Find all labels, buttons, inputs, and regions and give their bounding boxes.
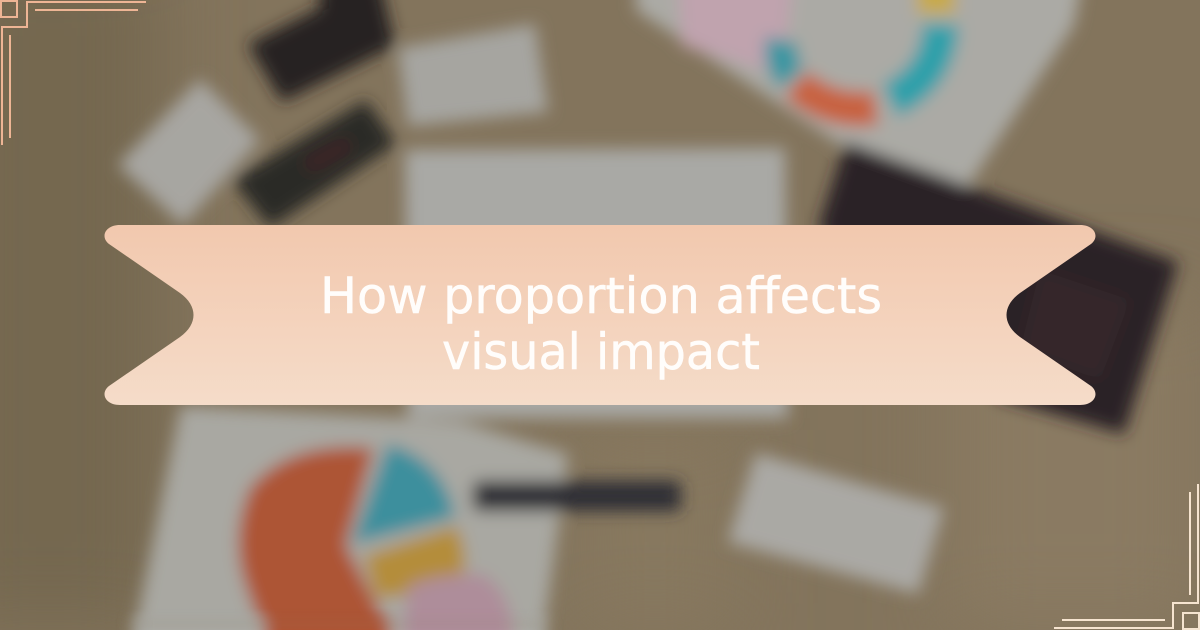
title xyxy=(320,267,882,381)
pie chart: yellow xyxy=(364,526,465,598)
keyboard xyxy=(405,148,788,418)
corner ornament: bottom right xyxy=(1054,484,1199,629)
pie chart: orange xyxy=(238,447,390,630)
top card xyxy=(398,24,548,126)
bottom edge restoration of paper and pie xyxy=(126,612,552,630)
donut chart xyxy=(781,40,792,78)
top right paper xyxy=(636,0,1082,186)
corner ornament: top left xyxy=(1,1,146,145)
pie chart: pink xyxy=(404,574,512,630)
dark tablet xyxy=(818,142,1178,434)
dark phone xyxy=(248,0,395,102)
bottom right card xyxy=(728,453,944,594)
ribbon banner xyxy=(105,225,1095,405)
bottom left paper xyxy=(135,406,568,630)
dark remote xyxy=(232,100,396,228)
left card xyxy=(118,79,260,225)
dark bar xyxy=(473,481,681,511)
title: visual impact xyxy=(442,323,760,381)
pie chart: teal xyxy=(352,444,455,544)
title: How proportion affects xyxy=(320,267,882,325)
